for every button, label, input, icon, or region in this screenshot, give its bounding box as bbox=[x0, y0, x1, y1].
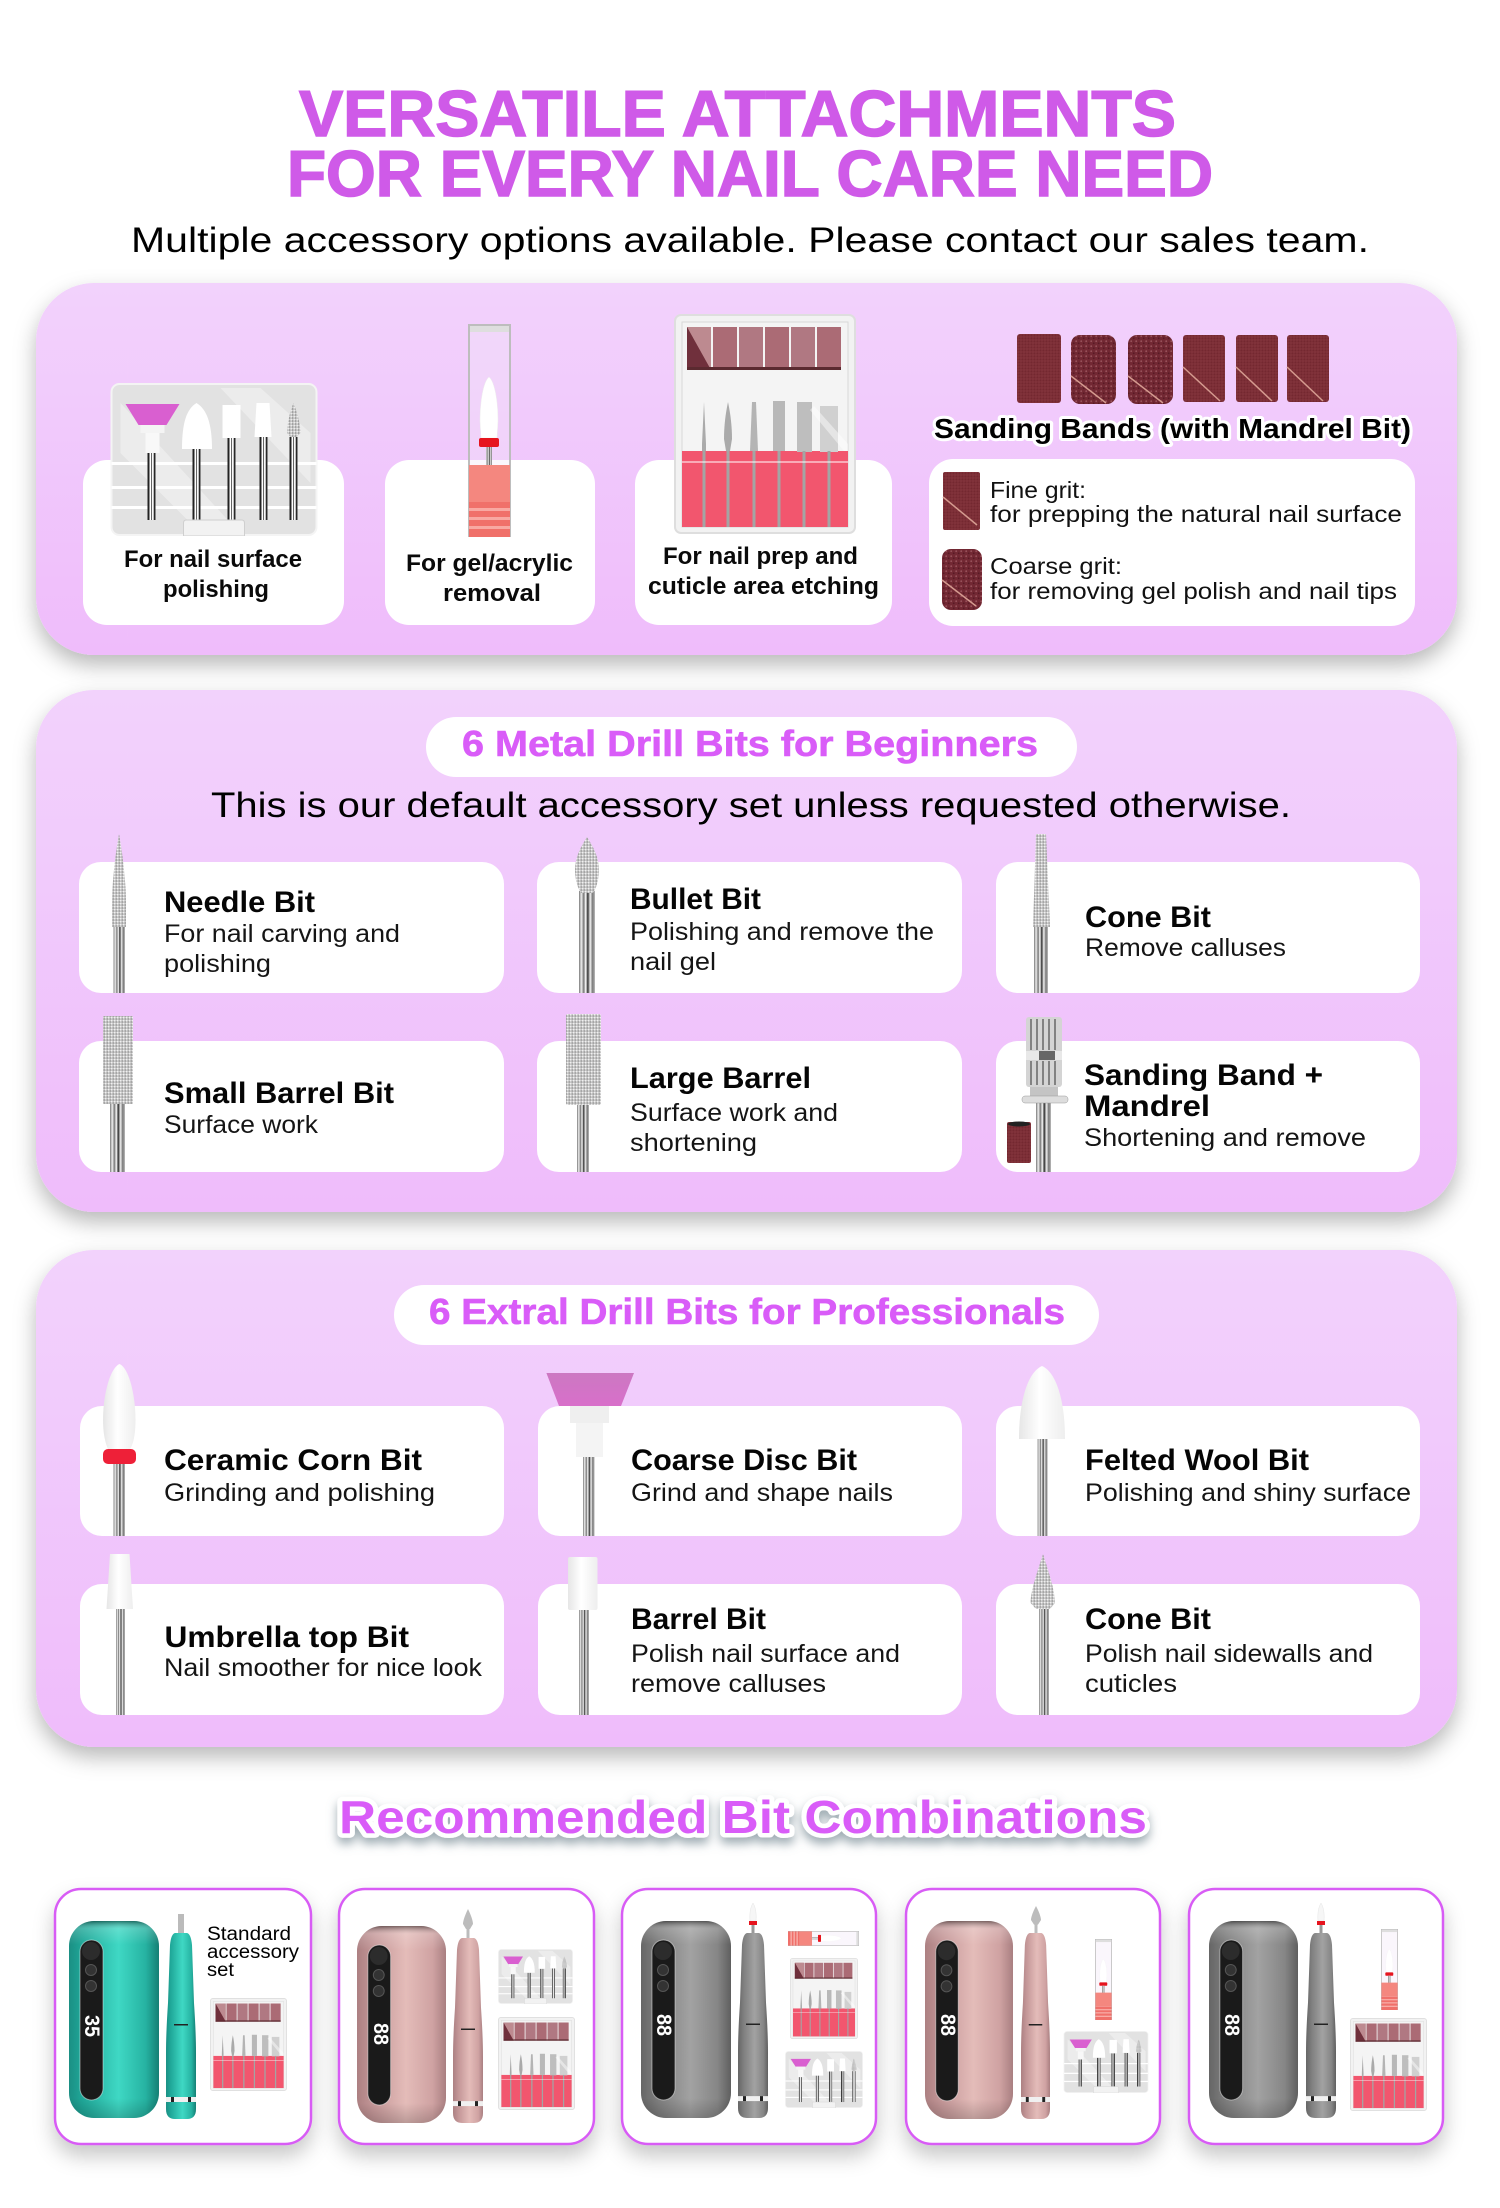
card: coarse disc bit: Grind and shape nails bbox=[631, 1479, 893, 1507]
card: sanding band and mandrel: Shortening and remove bbox=[1084, 1124, 1366, 1152]
card: umbrella top bit: Nail smoother for nice look bbox=[164, 1654, 483, 1682]
card: cone bit: Remove calluses bbox=[1085, 934, 1286, 962]
title: FOR EVERY NAIL CARE NEED bbox=[287, 137, 1213, 210]
card: needle bit bbox=[79, 834, 504, 993]
card: grit types: for removing gel polish and nail tips bbox=[990, 578, 1397, 604]
title: VERSATILE ATTACHMENTS bbox=[299, 77, 1176, 150]
card: bullet bit: nail gel bbox=[630, 948, 716, 976]
card: barrel bit: remove calluses bbox=[631, 1670, 826, 1698]
card: small barrel bit: Small Barrel Bit bbox=[164, 1077, 394, 1110]
combo card 2: rose gold: 88 bbox=[369, 2023, 392, 2045]
card: sanding band and mandrel: Sanding Band + bbox=[1084, 1059, 1323, 1092]
card: nail prep and etching bbox=[635, 315, 892, 625]
heading: recommended bit combinations: Recommended Bit Combinations bbox=[339, 1791, 1147, 1843]
sanding bands row bbox=[1017, 334, 1329, 404]
card: ceramic corn bit: Grinding and polishing bbox=[164, 1479, 435, 1507]
card: felted wool bit: Polishing and shiny surface bbox=[1085, 1479, 1411, 1507]
card: needle bit: polishing bbox=[164, 950, 271, 978]
card: sanding band and mandrel bbox=[996, 1017, 1420, 1172]
combo card 4: rose gold ceramic: 88 bbox=[936, 2014, 959, 2036]
combo card 3: gray bbox=[622, 1889, 876, 2144]
combo card 1: teal standard set: 35 bbox=[80, 2015, 103, 2037]
card: small barrel bit bbox=[79, 1016, 504, 1172]
pill heading: professionals: 6 Extral Drill Bits for Professionals bbox=[429, 1291, 1065, 1332]
card: cone bit professional bbox=[996, 1554, 1420, 1715]
card: sanding band and mandrel: Mandrel bbox=[1084, 1090, 1210, 1123]
card: nail prep and etching: cuticle area etching bbox=[648, 573, 879, 600]
card: cone bit bbox=[996, 834, 1420, 993]
combo card 1: teal standard set: accessory bbox=[207, 1942, 300, 1963]
combo card 1: teal standard set: Standard bbox=[207, 1924, 291, 1945]
card: ceramic corn bit: Ceramic Corn Bit bbox=[164, 1444, 422, 1477]
card: barrel bit: Polish nail surface and bbox=[631, 1640, 900, 1668]
card: grit types: Fine grit: bbox=[990, 477, 1086, 503]
combo card 2: rose gold bbox=[339, 1889, 594, 2144]
card: bullet bit bbox=[537, 837, 962, 993]
title bbox=[287, 77, 1213, 210]
combo card 5: gray ceramic: 88 bbox=[1220, 2014, 1243, 2036]
card: barrel bit bbox=[538, 1557, 962, 1715]
card: needle bit: For nail carving and bbox=[164, 920, 400, 948]
combo card 3: gray: 88 bbox=[652, 2014, 675, 2036]
card: gel acrylic removal: removal bbox=[443, 580, 541, 607]
pill heading: beginners: 6 Metal Drill Bits for Beginners bbox=[462, 723, 1038, 764]
card: felted wool bit bbox=[996, 1366, 1420, 1536]
card: umbrella top bit bbox=[80, 1554, 504, 1715]
card: nail surface polishing: For nail surface bbox=[124, 546, 302, 573]
card: cone bit professional: cuticles bbox=[1085, 1670, 1177, 1698]
card: needle bit: Needle Bit bbox=[164, 886, 315, 919]
panel: attachment sets bbox=[36, 283, 1457, 655]
card: small barrel bit: Surface work bbox=[164, 1111, 319, 1139]
panel: 6 extra drill bits bbox=[36, 1250, 1457, 1747]
card: gel acrylic removal: For gel/acrylic bbox=[406, 550, 573, 577]
card: grit types: Coarse grit: bbox=[990, 553, 1122, 579]
card: coarse disc bit: Coarse Disc Bit bbox=[631, 1444, 857, 1477]
card: nail surface polishing bbox=[83, 384, 344, 625]
card: cone bit professional: Cone Bit bbox=[1085, 1603, 1211, 1636]
card: grit types bbox=[929, 459, 1415, 626]
card: large barrel: shortening bbox=[630, 1129, 757, 1157]
card: cone bit professional: Polish nail sidewalls and bbox=[1085, 1640, 1373, 1668]
card: cone bit: Cone Bit bbox=[1085, 901, 1211, 934]
icon: fine grit band bbox=[943, 472, 980, 530]
note: default set: This is our default accessory set unless requested otherwise. bbox=[211, 786, 1291, 825]
combo card 1: teal standard set bbox=[55, 1889, 311, 2144]
card: nail surface polishing: polishing bbox=[163, 576, 269, 603]
card: coarse disc bit bbox=[538, 1373, 962, 1536]
icon: coarse grit band bbox=[942, 549, 982, 610]
card: grit types: for prepping the natural nail surface bbox=[990, 501, 1402, 527]
combo card 4: rose gold ceramic bbox=[906, 1889, 1160, 2144]
heading: sanding bands: Sanding Bands (with Mandrel Bit) bbox=[934, 413, 1411, 444]
card: ceramic corn bit bbox=[80, 1364, 504, 1536]
card: large barrel: Surface work and bbox=[630, 1099, 838, 1127]
card: large barrel bbox=[537, 1014, 962, 1172]
card: large barrel: Large Barrel bbox=[630, 1062, 811, 1095]
card: umbrella top bit: Umbrella top Bit bbox=[164, 1621, 409, 1654]
card: bullet bit: Bullet Bit bbox=[630, 883, 761, 916]
card: barrel bit: Barrel Bit bbox=[631, 1603, 766, 1636]
card: gel acrylic removal bbox=[385, 325, 595, 625]
subtitle: Multiple accessory options available. Please contact our sales team. bbox=[131, 221, 1369, 260]
combo card 1: teal standard set: set bbox=[207, 1960, 235, 1981]
pill heading: professionals bbox=[394, 1285, 1099, 1345]
panel: 6 metal drill bits bbox=[36, 690, 1457, 1212]
combo card 5: gray ceramic bbox=[1189, 1889, 1443, 2144]
card: bullet bit: Polishing and remove the bbox=[630, 918, 934, 946]
pill heading: beginners bbox=[426, 717, 1077, 777]
card: nail prep and etching: For nail prep and bbox=[663, 543, 858, 570]
card: felted wool bit: Felted Wool Bit bbox=[1085, 1444, 1309, 1477]
